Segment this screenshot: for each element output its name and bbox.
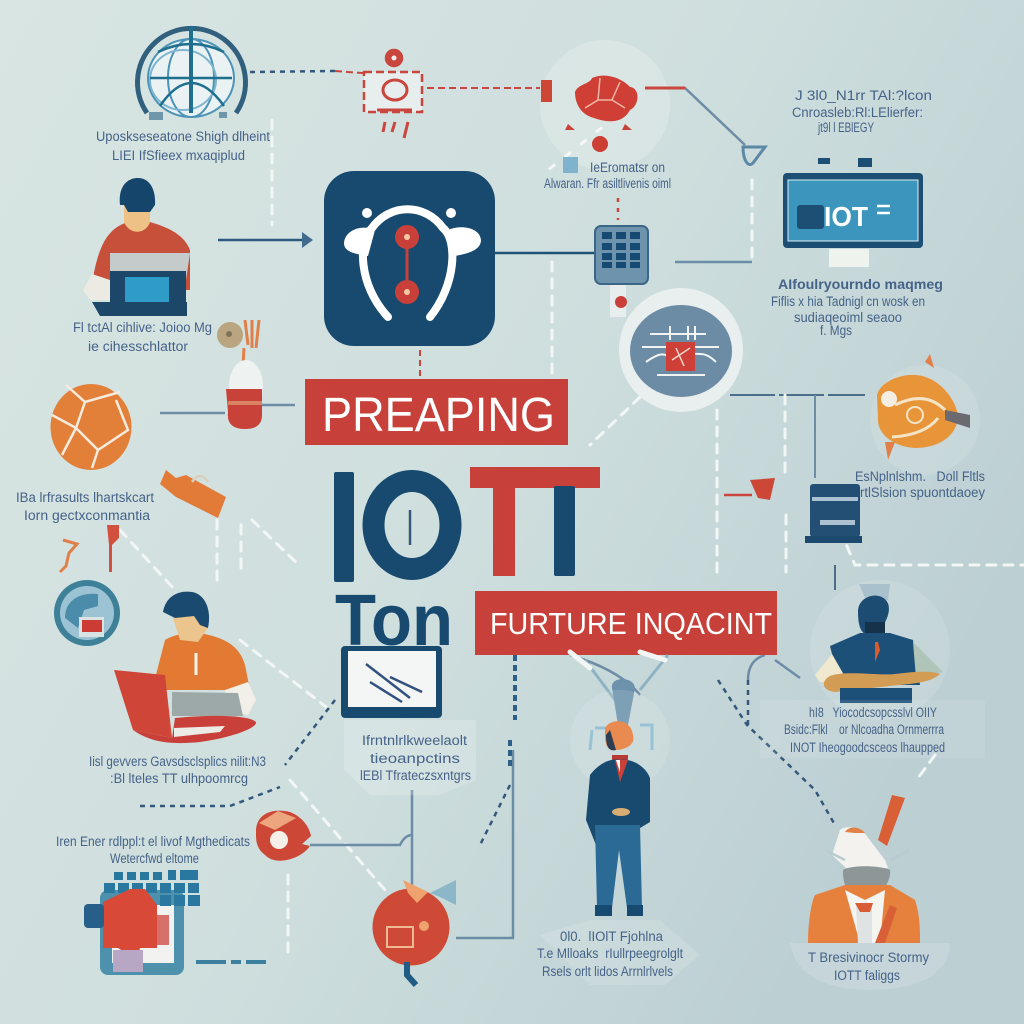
connector lines (120, 71, 1024, 962)
text block: masked person caption: INOT Iheogoodcsceos lhaupped (790, 740, 945, 755)
icon: monitor (341, 646, 442, 718)
icon: robot arm head (570, 652, 668, 750)
text block: orange pouch caption (855, 469, 985, 500)
text block: globe caption (96, 129, 270, 163)
icon: IOT monitor (783, 158, 923, 267)
text block: globe caption: Uposkseseatone Shigh dlheint (96, 129, 270, 144)
icon: red disc (372, 880, 456, 985)
icon: keypad (595, 198, 648, 317)
icon: IOT monitor: IOT (824, 201, 868, 232)
text block: monitor caption: Fiflis x hia Tadnigl cn wosk en (771, 294, 925, 309)
panel: monitor caption: Ifrntnlrlkweelaolt (362, 733, 467, 748)
text block: ball caption: Iorn gectxconmantia (24, 508, 150, 523)
text block: masked person caption: hI8 Yiocodcsopcsslvl OIIY (809, 705, 937, 720)
icon: tan roll with orange stripes (217, 320, 259, 366)
banner: Furture: FURTURE INQACINT (490, 606, 772, 641)
icon: blue circle (54, 580, 120, 646)
text block: masked person caption: Bsidc:Flkl or Nlcoadha Ornmerrra (784, 722, 944, 737)
text block: monitor heading: Cnroasleb:Rl:LElierfer: (792, 105, 923, 120)
icon: orange ball (50, 384, 132, 470)
text block: laptop person caption: Fl tctAl cihlive: Joioo Mg (73, 320, 212, 335)
icon: printer (805, 484, 862, 543)
icon: hook (743, 147, 765, 165)
text block: orange suit caption (790, 943, 950, 990)
banner: PREAPING: PREAPING (322, 389, 555, 442)
icon: red marker arrow (724, 478, 775, 500)
text block: red laptop caption: :Bl lteles TT ulhpoomrcg (110, 771, 248, 786)
text block: monitor heading: jt9l l EBlEGY (817, 120, 874, 135)
icon: orange pouch (870, 354, 980, 475)
panel: man in orange suit (808, 795, 920, 943)
text block: orange pouch caption: rtlSlsion spuontdaoey (860, 485, 985, 500)
icon: red circle tag (256, 811, 311, 861)
text block: masked person caption (760, 700, 985, 758)
title: IOTT (334, 467, 600, 582)
panel: person with mask (810, 580, 950, 720)
text block: red laptop caption: Iisl gevvers Gavsdsclsplics nilit:N3 (89, 754, 266, 769)
text block: orange pouch caption: EsNplnlshm. Doll Fltls (855, 469, 985, 484)
icon: main app icon (324, 171, 495, 346)
text block: man in suit caption: T.e Mlloaks rIullrpeegrolglt (537, 946, 683, 961)
text block: ball caption: IBa lrfrasults lhartskcart (16, 490, 154, 505)
banner: Furture (475, 591, 777, 655)
panel: monitor caption: tieoanpctins (370, 751, 460, 766)
text block: globe caption: LIEI IfSfieex mxaqiplud (112, 148, 245, 163)
heading: Ton: Ton (335, 581, 453, 661)
text block: monitor caption: sudiaqeoiml seaoo (794, 310, 902, 325)
text block: monitor caption (771, 277, 943, 338)
text block: monitor caption: AIfoulryourndo maqmeg (778, 277, 943, 292)
text block: orange suit caption: IOTT faliggs (834, 968, 900, 983)
icon: orange tool (160, 470, 226, 518)
text block: brain caption: Alwaran. Ffr asiltlivenis oiml (544, 176, 671, 191)
text block: ball caption (16, 490, 154, 523)
text block: brain caption: IeEromatsr on (590, 160, 665, 175)
text block: man in suit caption (537, 920, 700, 985)
icon: tablet and keyboard (84, 870, 200, 975)
icon: red pouch (226, 360, 263, 429)
text block: monitor heading (792, 88, 932, 135)
text block: laptop person caption (73, 320, 212, 354)
text block: monitor caption: f. Mgs (820, 323, 852, 338)
panel: person at red laptop (114, 592, 256, 743)
icon: red robot (364, 50, 422, 138)
panel: monitor caption (344, 720, 476, 795)
text block: keyboard caption (56, 834, 250, 866)
icon: red brain (540, 40, 685, 170)
text block: brain caption (544, 157, 671, 191)
icon: small red markers (60, 525, 119, 572)
text block: man in suit caption: Rsels orlt lidos Arrnlrlvels (542, 964, 673, 979)
text block: keyboard caption: Wetercfwd eltome (110, 851, 199, 866)
text block: laptop person caption: ie cihesschlattor (88, 339, 189, 354)
panel: person with laptop (83, 178, 190, 316)
text block: monitor heading: J 3l0_N1rr TAl:?lcon (795, 88, 932, 103)
panel: man in suit (570, 690, 670, 916)
text block: man in suit caption: 0l0. lIOlT Fjohlna (560, 929, 663, 944)
text block: red laptop caption (89, 754, 266, 786)
panel: monitor caption: lEBl Tfrateczsxntgrs (360, 768, 471, 783)
icon: chip circle (619, 288, 743, 412)
icon: globe (138, 26, 246, 120)
text block: keyboard caption: Iren Ener rdlppl:t el livof Mgthedicats (56, 834, 250, 849)
text block: orange suit caption: T Bresivinocr Stormy (808, 950, 929, 965)
